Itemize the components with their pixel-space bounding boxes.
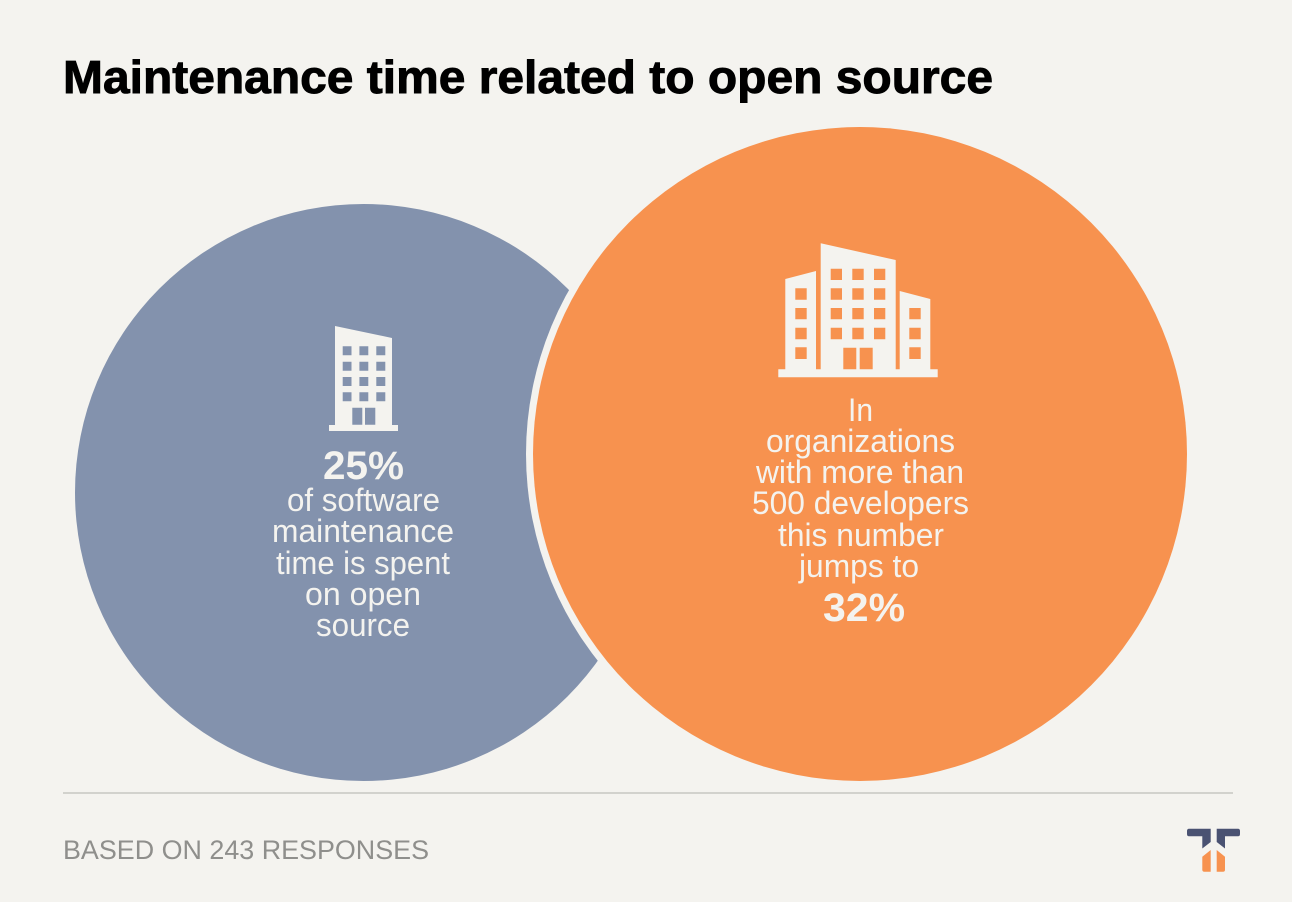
title: Maintenance time related to open source [63, 51, 993, 103]
footer note: BASED ON 243 RESPONSES [63, 835, 429, 865]
icon: office building group [778, 243, 938, 377]
text: 25% statistic: on open [305, 576, 421, 612]
text: 32% statistic: In [848, 392, 873, 428]
panel: blue circle 25% [75, 120, 1194, 788]
text: 32% statistic: 32% [823, 586, 905, 630]
text: 25% statistic: source [316, 607, 410, 643]
text: 32% statistic: jumps to [798, 548, 919, 584]
text: 25% statistic: maintenance [272, 513, 454, 549]
panel: orange circle 32% [533, 127, 1187, 781]
icon: logo [1187, 829, 1240, 872]
text: 32% statistic: 500 developers [752, 485, 969, 521]
text: 25% statistic: 25% [323, 444, 404, 488]
text: 32% statistic: with more than [755, 454, 964, 490]
text: 32% statistic: this number [778, 517, 944, 553]
text: 32% statistic: organizations [766, 423, 955, 459]
icon: single office building [329, 326, 398, 431]
text: 32% statistic [752, 392, 969, 630]
text: 25% statistic: time is spent [276, 545, 450, 581]
text: 25% statistic [272, 444, 454, 643]
text: 25% statistic: of software [287, 482, 440, 518]
